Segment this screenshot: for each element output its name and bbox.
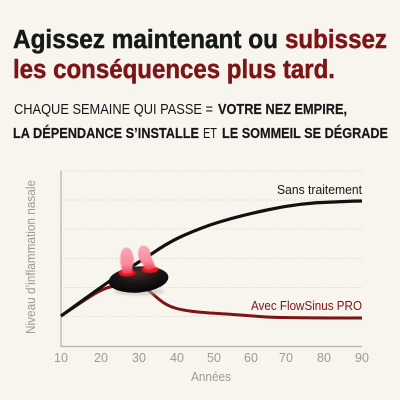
x axis ticks: 90 bbox=[355, 351, 369, 365]
chart bbox=[23, 171, 369, 384]
x axis ticks: 30 bbox=[132, 351, 146, 365]
icon: nasal device bbox=[107, 246, 170, 296]
x axis ticks: 20 bbox=[94, 351, 108, 365]
title: Agissez maintenant ou bbox=[13, 26, 278, 54]
subtitle: LA DÉPENDANCE S’INSTALLE bbox=[13, 125, 199, 142]
title: les conséquences plus tard. bbox=[13, 56, 335, 84]
curve: with FlowSinus PRO bbox=[61, 284, 362, 318]
title bbox=[13, 26, 387, 84]
x axis title: Années bbox=[191, 370, 231, 384]
subtitle: VOTRE NEZ EMPIRE, bbox=[218, 101, 347, 118]
x axis ticks: 80 bbox=[317, 351, 331, 365]
subtitle bbox=[13, 101, 388, 142]
y axis title: Niveau d’inflammation nasale bbox=[23, 180, 38, 334]
x axis ticks: 40 bbox=[170, 351, 184, 365]
subtitle: ET bbox=[203, 125, 217, 142]
curve: without treatment bbox=[61, 201, 362, 316]
x axis ticks: 10 bbox=[54, 351, 68, 365]
title: subissez bbox=[285, 26, 387, 54]
label: Sans traitement: Sans traitement bbox=[277, 183, 363, 197]
label: Avec FlowSinus PRO: Avec FlowSinus PRO bbox=[251, 299, 362, 313]
x axis ticks: 50 bbox=[207, 351, 221, 365]
axes bbox=[61, 171, 362, 346]
x axis ticks bbox=[54, 351, 369, 365]
x axis ticks: 70 bbox=[279, 351, 293, 365]
x axis ticks: 60 bbox=[244, 351, 258, 365]
subtitle: CHAQUE SEMAINE QUI PASSE = bbox=[14, 101, 213, 118]
